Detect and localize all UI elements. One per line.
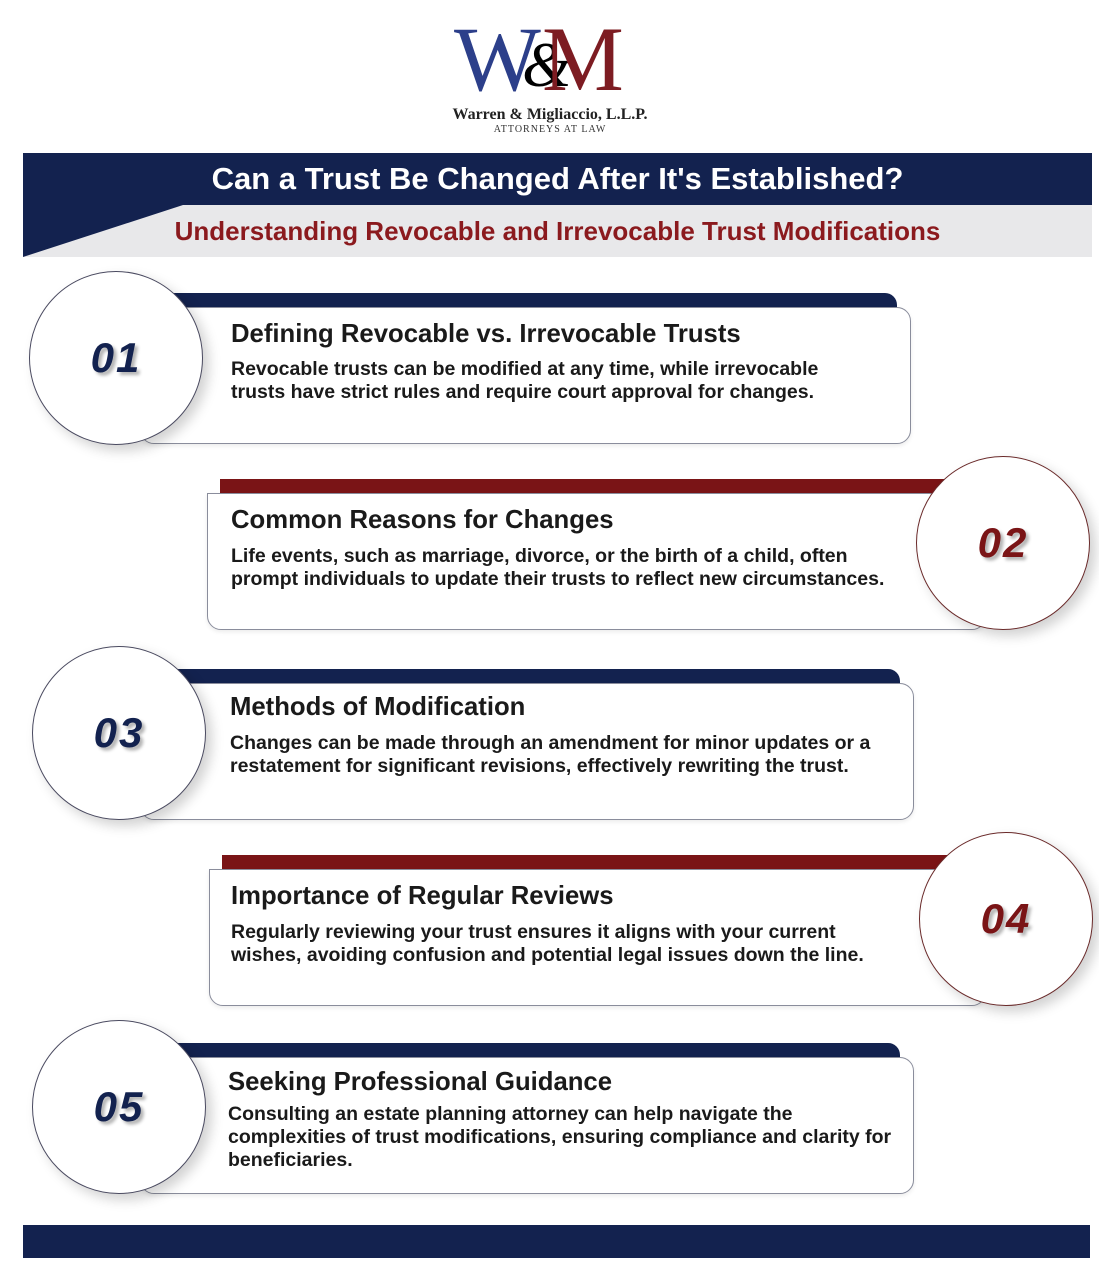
circle 03: 03 [94, 709, 144, 756]
card 1: Revocable trusts can be modified at any time, while irrevocable [231, 358, 818, 380]
circle 02: 02 [978, 519, 1028, 566]
circle 05: 05 [94, 1083, 144, 1130]
card 4: wishes, avoiding confusion and potential legal issues down the line. [231, 944, 864, 966]
card 4: Importance of Regular Reviews [231, 882, 614, 910]
card 1: Defining Revocable vs. Irrevocable Trusts [231, 320, 741, 348]
card 3: Changes can be made through an amendment for minor updates or a [230, 732, 870, 754]
card 4 [208, 832, 1099, 1017]
card 3 [32, 646, 914, 831]
logo: M [542, 8, 624, 110]
logo: & [522, 29, 572, 100]
card 3: restatement for significant revisions, effectively rewriting the trust. [230, 755, 849, 777]
logo: W [454, 8, 541, 110]
title: Can a Trust Be Changed After It's Established? [212, 161, 903, 196]
card 5: Seeking Professional Guidance [228, 1068, 612, 1096]
circle 02 [916, 456, 1090, 630]
circle 01: 01 [91, 334, 141, 381]
card 5: beneficiaries. [228, 1149, 353, 1171]
card 3: Methods of Modification [230, 693, 525, 721]
card 5: complexities of trust modifications, ensuring compliance and clarity for [228, 1126, 891, 1148]
circle 04 [919, 832, 1093, 1006]
subtitle: Understanding Revocable and Irrevocable Trust Modifications [175, 216, 940, 246]
logo: Warren & Migliaccio, L.L.P. [452, 106, 648, 123]
circle 04: 04 [981, 895, 1031, 942]
card 5 [32, 1020, 914, 1205]
header banner [23, 153, 1092, 257]
circle 05 [32, 1020, 206, 1194]
logo [452, 8, 648, 135]
circle 03 [32, 646, 206, 820]
card 1: trusts have strict rules and require court approval for changes. [231, 381, 814, 403]
card 2 [206, 456, 1099, 641]
card 1 [29, 271, 912, 456]
circle 01 [29, 271, 203, 445]
card 5: Consulting an estate planning attorney can help navigate the [228, 1103, 793, 1125]
card 2: Common Reasons for Changes [231, 506, 614, 534]
card 4: Regularly reviewing your trust ensures it aligns with your current [231, 921, 836, 943]
footer bar [23, 1225, 1090, 1258]
card 2: prompt individuals to update their trusts to reflect new circumstances. [231, 568, 884, 590]
card 2: Life events, such as marriage, divorce, or the birth of a child, often [231, 545, 848, 567]
logo: ATTORNEYS AT LAW [494, 124, 606, 135]
